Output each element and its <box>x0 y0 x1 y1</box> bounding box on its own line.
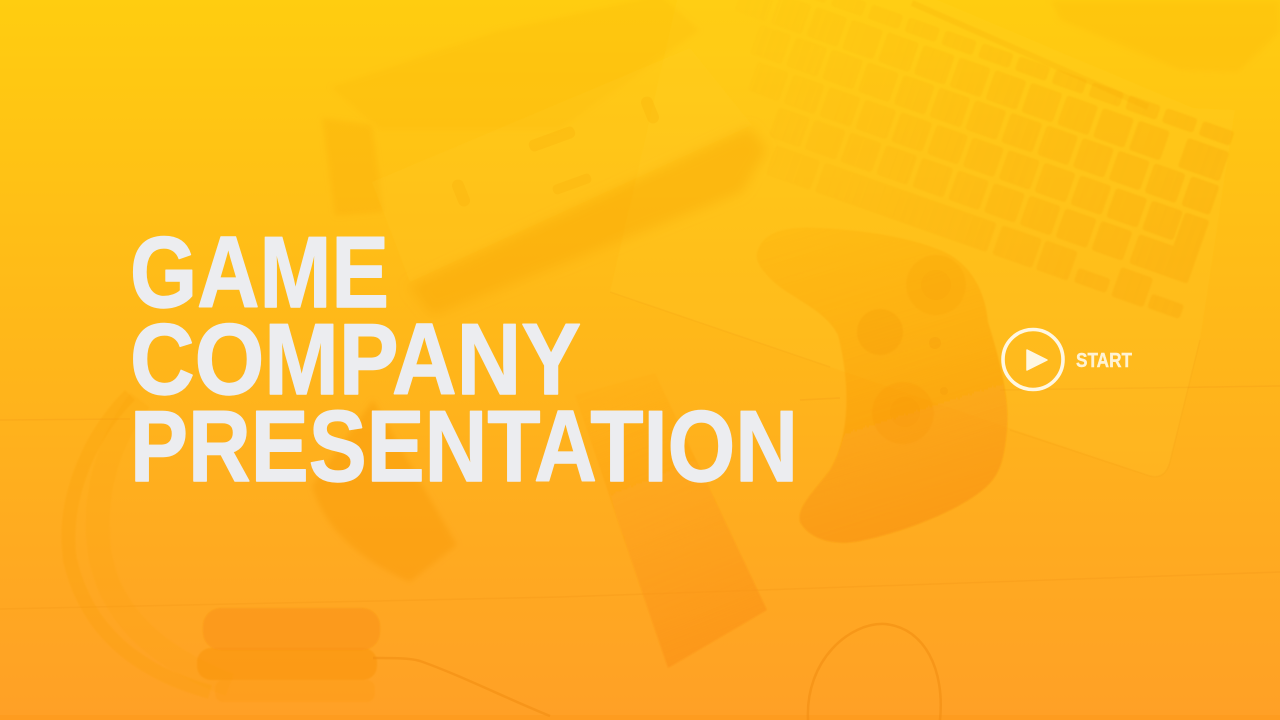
title: COMPANY <box>130 304 581 416</box>
title: PRESENTATION <box>130 391 798 503</box>
title: GAME <box>130 217 389 329</box>
background photo: smartphone <box>575 373 767 668</box>
background photo: laptop body <box>610 0 1280 477</box>
background photo: VR headset <box>322 0 767 316</box>
title <box>130 217 798 503</box>
start label: START <box>1076 349 1132 372</box>
background photo: game controller <box>757 228 1008 543</box>
bottom edge band <box>0 715 1280 720</box>
background photo: headphone right cup <box>312 400 457 582</box>
background photo: headphone ear cup <box>197 608 380 702</box>
start button <box>1003 330 1132 390</box>
background photo: laptop keyboard <box>1028 64 1233 316</box>
background photo: headphones band <box>68 395 230 692</box>
icon: play button <box>1003 330 1063 390</box>
background photo: desk lines <box>0 386 1280 609</box>
background photo: cables <box>373 624 941 720</box>
